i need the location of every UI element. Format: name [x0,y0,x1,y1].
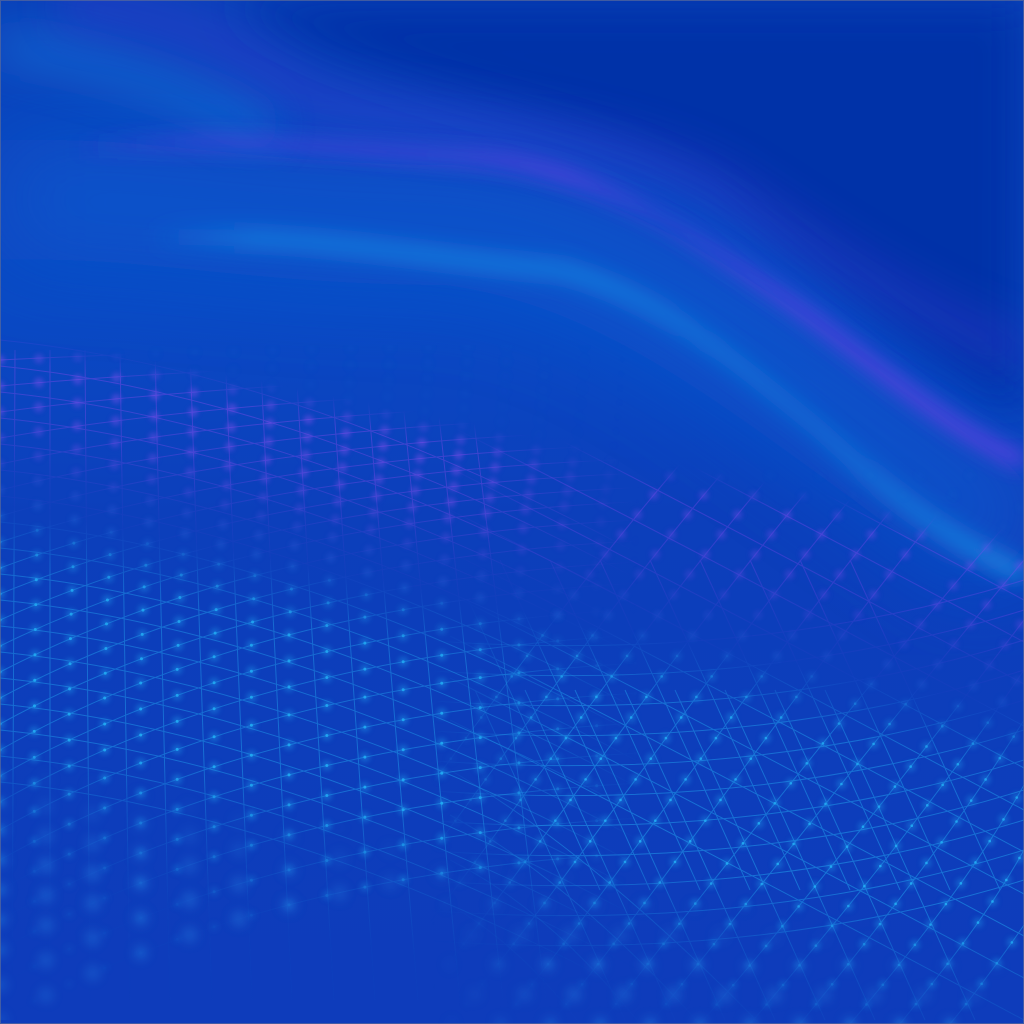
mesh left: large out-of-focus nodes [1,804,395,1020]
wave band: wide mid blue [0,199,1024,550]
mesh left: cyan lines [0,515,609,942]
wave band: purple highlight [70,142,1024,462]
mesh left: soft cyan nodes [0,504,598,917]
mesh right: purple lines and nodes [464,440,1024,688]
wave band: top faint purple [60,5,1024,355]
mesh: left lattice [0,340,613,1020]
mesh left: purple lines and nodes [0,340,614,594]
mesh: right lattice [450,440,1024,1024]
wave band: cyan highlight [150,237,1024,575]
mesh right: soft cyan nodes [470,614,1023,1023]
wave band: upper cyan [0,45,270,130]
mesh right: cyan lines [450,626,1024,1022]
mesh right: large out-of-focus nodes [518,929,975,1023]
dark top-right sky [230,0,1024,420]
